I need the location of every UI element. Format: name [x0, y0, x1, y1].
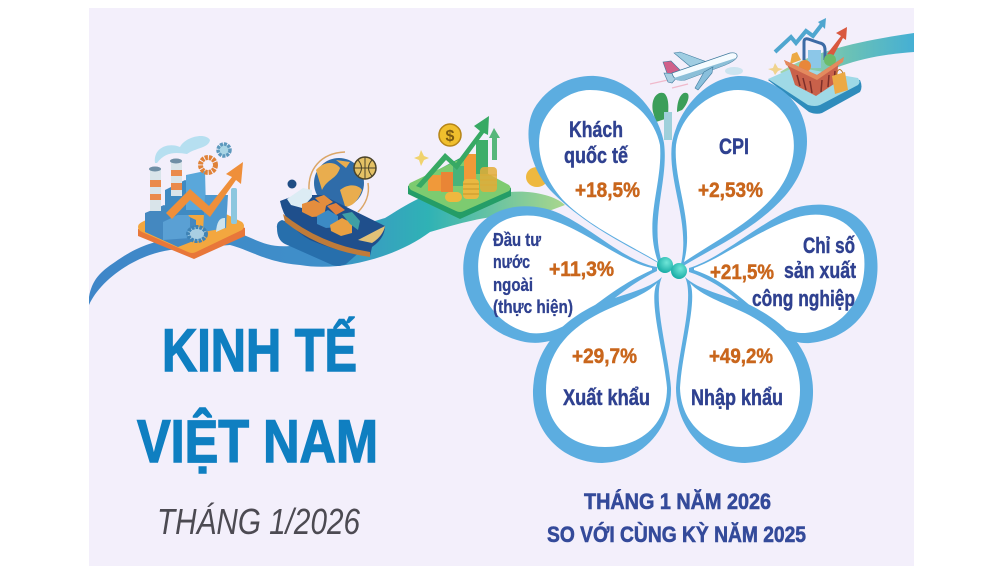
ribbon path connecting icons: [89, 33, 914, 305]
title: VIỆT NAM: [137, 408, 378, 475]
label: Khách: [569, 117, 623, 142]
petal labels and values: Nhập khẩu: [691, 385, 783, 410]
petal labels and values: +18,5%: [575, 179, 640, 202]
petal labels and values: (thực hiện): [493, 297, 573, 317]
dollar sign: $: [446, 128, 455, 145]
petal: Chỉ số sản xuất công nghiệp: [689, 205, 878, 343]
petal labels and values: sản xuất: [784, 258, 857, 283]
icon: shopping basket with arrows: [768, 18, 862, 114]
petal labels and values: công nghiệp: [752, 286, 855, 311]
petal: Xuất khẩu: [533, 277, 671, 463]
petal labels and values: +49,2%: [709, 345, 773, 368]
icon: airplane and karst rocks: [650, 52, 743, 140]
petal labels and values: +2,53%: [698, 179, 763, 202]
petal labels and values: Xuất khẩu: [563, 385, 650, 410]
petal: Khách quốc tế: [528, 76, 665, 266]
petal labels and values: nước: [493, 252, 530, 272]
flower diagram: [463, 76, 878, 463]
petal labels and values: +11,3%: [549, 258, 614, 281]
petal labels and values: ngoài: [493, 275, 533, 295]
petal: Nhập khẩu: [676, 277, 813, 463]
petal labels and values: +21,5%: [710, 261, 774, 284]
petal labels and values: +29,7%: [572, 345, 637, 368]
gold coins behind petals: [526, 167, 548, 187]
icon: factory: [138, 136, 245, 259]
centre beads: [657, 257, 687, 279]
petal: CPI: [671, 76, 807, 268]
subtitle: THÁNG 1/2026: [157, 501, 361, 542]
label: Chỉ số: [803, 233, 855, 258]
title: [137, 317, 378, 475]
comparison caption: THÁNG 1 NĂM 2026: [584, 489, 771, 514]
petal labels and values: quốc tế: [564, 143, 629, 168]
icon: investment chart: [408, 116, 511, 219]
comparison caption: [547, 489, 806, 547]
title: KINH TẾ: [162, 317, 357, 384]
petal: Đầu tư nước ngoài: [463, 206, 657, 343]
comparison caption: SO VỚI CÙNG KỲ NĂM 2025: [547, 522, 806, 547]
label: CPI: [719, 134, 749, 159]
icon: cargo ship and globe: [277, 152, 385, 266]
petal labels and values: [493, 143, 857, 410]
label: Đầu tư: [493, 230, 542, 250]
